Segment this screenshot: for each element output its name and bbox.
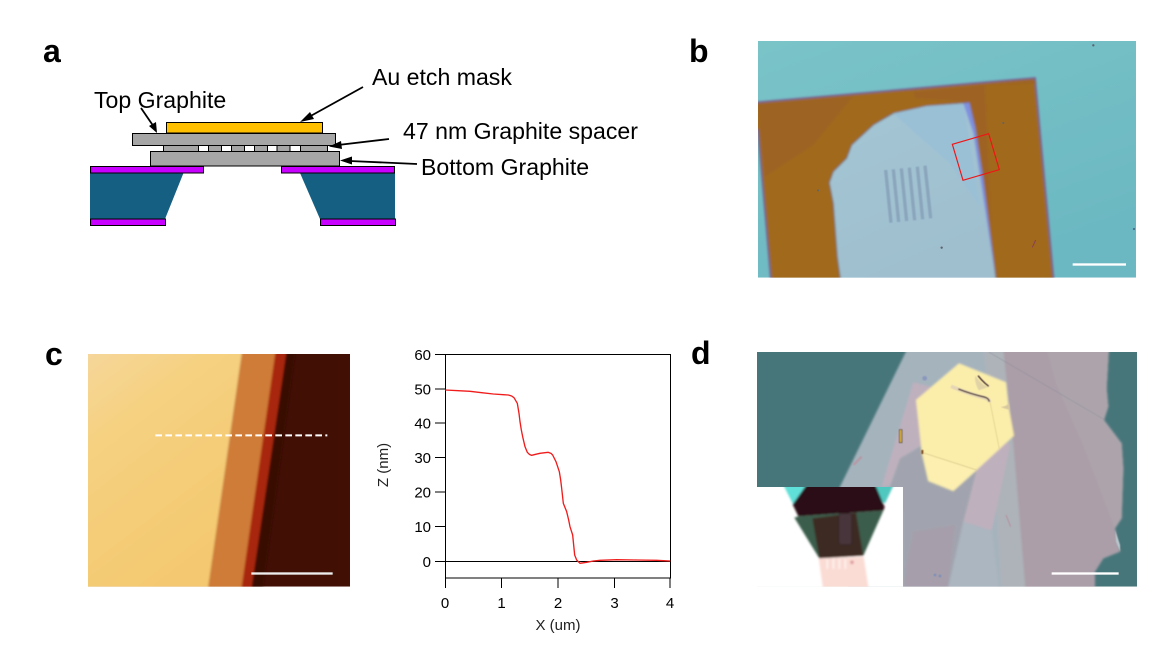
flake fold lines bbox=[853, 352, 1120, 577]
label: panel d: d bbox=[691, 335, 711, 371]
inset green lower body bbox=[794, 511, 883, 558]
inset pink lead bbox=[818, 554, 869, 587]
etched stripes array bbox=[886, 166, 931, 223]
yellow hexagonal flake bbox=[915, 362, 1015, 471]
arrow: bottom graphite bbox=[340, 156, 417, 164]
y tick labels bbox=[414, 347, 431, 571]
text: Au etch mask: Au etch mask bbox=[372, 64, 512, 90]
text: Bottom Graphite: Bottom Graphite bbox=[421, 154, 589, 180]
panel a: device cross-section schematic bbox=[90, 122, 396, 226]
scale bar bbox=[1073, 263, 1126, 266]
y tick labels: 0 bbox=[423, 554, 431, 571]
arrow: top graphite bbox=[141, 108, 157, 133]
pink layer rectangle bbox=[882, 382, 1010, 530]
x axis title: X (um) bbox=[536, 617, 581, 634]
zero reference line bbox=[445, 560, 670, 562]
specks bbox=[922, 376, 927, 381]
arrow: Au etch mask bbox=[300, 87, 363, 122]
inset teal corners bbox=[782, 487, 808, 506]
red profile curve bbox=[445, 390, 670, 563]
arrow: graphite spacer bbox=[329, 139, 389, 149]
debris specks bbox=[817, 44, 1135, 249]
panel b: optical micrograph bbox=[750, 41, 1136, 288]
x tick labels: 4 bbox=[666, 595, 674, 612]
inset window slot bbox=[839, 513, 852, 545]
y tick labels: 20 bbox=[414, 484, 431, 502]
x tick labels bbox=[441, 595, 674, 612]
bottom graphite layer bbox=[150, 152, 340, 166]
panel d: optical micrograph with inset bbox=[757, 342, 1137, 597]
dark band beside the step bbox=[250, 354, 294, 587]
label: panel a: a bbox=[43, 33, 61, 69]
wrinkles on flake bbox=[951, 386, 989, 402]
yellow plateau bbox=[88, 354, 244, 587]
text: Top Graphite: Top Graphite bbox=[94, 87, 226, 113]
nitride layers: purple bbox=[90, 166, 396, 226]
top graphite layer bbox=[132, 134, 336, 146]
brown frame bbox=[750, 78, 1054, 288]
flake stack base bbox=[838, 352, 1002, 587]
dashed profile line bbox=[155, 434, 328, 436]
x tick labels: 1 bbox=[497, 595, 506, 612]
scale bar bbox=[1052, 572, 1119, 575]
y axis title: Z (nm) bbox=[375, 443, 392, 487]
Au etch mask layer bbox=[166, 122, 322, 133]
y tick labels: 50 bbox=[414, 382, 431, 398]
substrate: right silicon block bbox=[300, 173, 395, 219]
text: 47 nm Graphite spacer: 47 nm Graphite spacer bbox=[403, 118, 638, 144]
y tick labels: 40 bbox=[414, 416, 431, 432]
label: panel c: c bbox=[45, 336, 63, 372]
y tick labels: 10 bbox=[414, 519, 431, 536]
plot frame bbox=[446, 354, 670, 578]
x tick labels: 0 bbox=[441, 595, 449, 612]
grey overlap region bbox=[890, 448, 976, 582]
chart: height profile line plot bbox=[375, 347, 674, 634]
substrate: left silicon block bbox=[90, 173, 184, 219]
graphite spacer segments bbox=[164, 145, 328, 152]
y tick labels: 60 bbox=[414, 347, 431, 364]
panel c: AFM height map bbox=[88, 354, 350, 587]
x tick labels: 2 bbox=[554, 595, 562, 612]
scale bar bbox=[251, 572, 333, 575]
x tick labels: 3 bbox=[610, 595, 619, 612]
blue lower band bbox=[946, 522, 1000, 597]
orange terrace bbox=[207, 343, 277, 598]
small gold marker bbox=[899, 430, 902, 443]
axis ticks bbox=[435, 354, 670, 588]
inset: device close-up bbox=[757, 487, 903, 587]
inset dark upper trapezoid bbox=[793, 482, 885, 516]
blue membrane window bbox=[829, 103, 997, 288]
y tick labels: 30 bbox=[414, 450, 431, 467]
right edge notch bbox=[1115, 530, 1120, 552]
dark red transition band bbox=[240, 354, 288, 587]
inset brown central strip bbox=[812, 513, 863, 558]
pink graphite region bbox=[1003, 352, 1120, 586]
red region marker bbox=[952, 134, 999, 180]
label: panel b: b bbox=[689, 33, 709, 69]
